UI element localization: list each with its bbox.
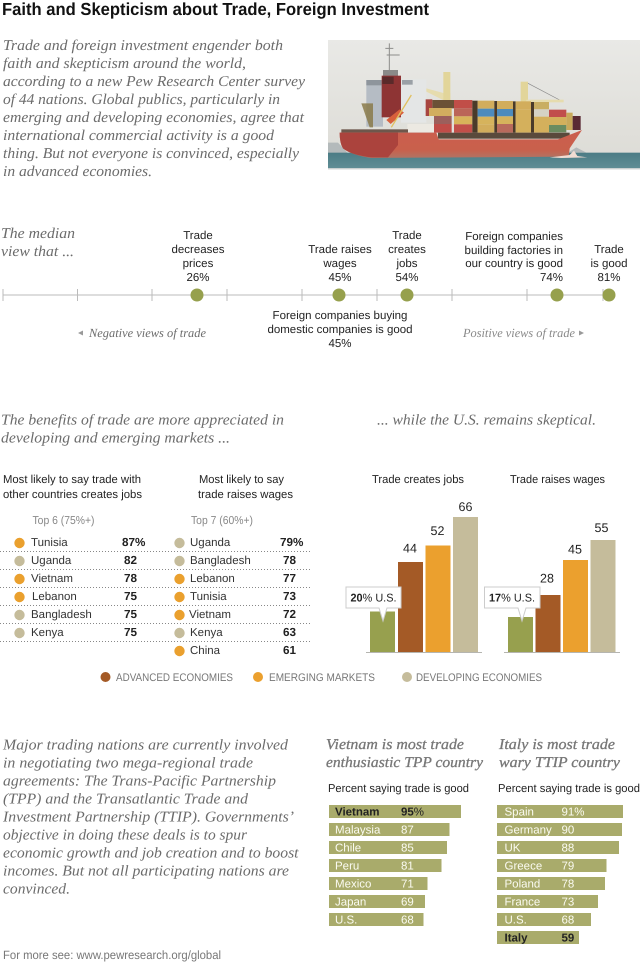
marker: foreign companies building factories: 74% [540,272,563,284]
bar chart: U.S. [335,914,357,926]
intro text block: in advanced economies. [3,164,152,180]
rows: China [190,645,221,657]
heading [498,737,640,795]
rows: Lebanon [32,591,77,603]
heading: Percent saying trade is good [328,783,469,795]
heading: enthusiastic TPP country [326,755,483,771]
bar chart: trade creates jobs [346,474,482,652]
bar chart: Italy [504,932,528,944]
rows: Vietnam [31,573,73,585]
marker: trade creates jobs: Trade [392,230,422,242]
rows: Bangladesh [31,609,92,621]
intro text block: international commercial activity is a good [3,128,275,144]
bar chart: trade raises wages: 55 [595,521,608,535]
intro text block: according to a new Pew Research Center survey [3,74,305,90]
rows: Vietnam [189,609,231,621]
rows: 72 [283,608,297,621]
photo: container ship [328,40,640,169]
bar chart: 90 [562,824,574,836]
callout: foreign companies buying domestic companies: 45% [328,338,352,350]
marker: trade decreases prices: prices [183,258,214,270]
section heading: benefits: The benefits of trade are more appreciated in [1,412,284,428]
intro text block: faith and skepticism around the world, [3,56,246,72]
label: the median view: view that ... [1,244,74,260]
callout: 20% U.S. [346,587,401,621]
bar chart: Germany [504,824,552,836]
section heading: benefits [1,412,284,446]
callout: foreign companies buying domestic companies: domestic companies is good [267,324,413,336]
rows [174,536,304,657]
body text: trade agreements: convinced. [3,882,70,898]
rows: 78 [283,554,297,567]
bar chart: Greece [504,860,542,872]
marker: trade is good: 81% [597,272,621,284]
intro text block: of 44 nations. Global publics, particularly in [3,92,280,108]
bar chart: 95% [401,806,424,818]
label: the median view: The median [1,226,75,242]
bar chart: 78 [562,878,574,890]
bar chart: 68 [562,914,574,926]
bar chart: France [504,896,540,908]
legend: ADVANCED ECONOMIES [116,672,233,684]
bar chart: 69 [401,896,414,908]
marker: trade decreases prices: decreases [171,244,225,256]
bar chart: Malaysia [335,824,381,836]
marker: trade is good: is good [590,258,628,270]
rows: 75 [124,608,138,621]
body text: trade agreements: in negotiating two mega-regional trade [3,756,253,772]
callout: foreign companies buying domestic companies: Foreign companies buying [273,310,407,322]
bar chart: Poland [504,878,540,890]
bar chart: Spain [504,806,534,818]
callout: 17% U.S. [484,587,540,621]
body text: trade agreements: Investment Partnership (TTIP). Governments’ [2,810,294,826]
rows: Kenya [190,627,223,639]
marker: trade creates jobs [388,230,426,302]
body text: trade agreements: agreements: The Trans-Pacific Partnership [3,774,277,790]
legend: DEVELOPING ECONOMIES [416,672,542,684]
table heading: Most likely to say [199,474,284,486]
label: the median view [1,226,75,260]
rows: Uganda [31,555,72,567]
marker: trade creates jobs: 54% [395,272,419,284]
bar chart: trade creates jobs: Trade creates jobs [372,474,464,486]
table: raises wages [174,474,304,657]
marker: trade decreases prices: 26% [186,272,210,284]
bar chart: Vietnam [335,806,380,818]
marker: foreign companies building factories: Foreign companies [465,231,563,243]
rows: Bangladesh [190,555,251,567]
bar chart [497,805,623,944]
rows: Kenya [31,627,64,639]
table heading: Most likely to say trade with [3,474,141,486]
bar chart: trade raises wages: 28 [540,572,554,586]
intro text block: thing. But not everyone is convinced, especially [3,146,299,162]
marker: foreign companies building factories: our country is good [465,258,563,270]
arrow label: negative views: Negative views of trade [88,326,206,340]
footer source note: For more see: www.pewresearch.org/global [3,948,221,962]
table heading: other countries creates jobs [3,489,142,501]
bar chart: U.S. [504,914,527,926]
bar chart: 71 [401,878,414,890]
bar chart: UK [504,842,521,854]
bar chart: 79 [562,860,574,872]
bar chart: trade raises wages: Trade raises wages [510,474,605,486]
heading: Vietnam is most trade [326,737,464,753]
bar chart: trade raises wages [484,474,620,652]
rows: Tunisia [31,537,68,549]
bar chart: 81 [401,860,414,872]
heading [326,737,483,795]
marker: foreign companies building factories [465,231,564,302]
section heading: benefits: developing and emerging markets ... [1,430,230,446]
intro text block: emerging and developing economies, agree that [3,110,305,126]
bar chart: trade raises wages: 45 [568,542,582,556]
bar chart: Chile [335,842,361,854]
heading: Italy is most trade [498,737,615,753]
intro text block: Trade and foreign investment engender both [3,38,283,54]
callout: foreign companies buying domestic companies [267,310,413,350]
bar chart: 59 [562,932,574,944]
rows: 87% [122,536,146,549]
bar chart: Mexico [335,878,371,890]
callout: 20% U.S.: 20% U.S. [350,592,396,604]
table heading: trade raises wages [198,489,293,501]
rows [14,536,146,639]
heading: Percent saying trade is good [498,783,640,795]
bar chart: 91% [562,806,585,818]
marker: trade raises wages [308,244,372,302]
bar chart: 88 [562,842,574,854]
bar chart: 87 [401,824,414,836]
rows: 79% [280,536,304,549]
bar chart: trade creates jobs: 44 [403,542,417,556]
rows: Tunisia [190,591,227,603]
table heading: Top 7 (60%+) [191,515,253,527]
body text: trade agreements: incomes. But not all participating nations are [3,864,289,880]
heading: wary TTIP country [499,755,620,771]
marker: trade creates jobs: jobs [395,258,418,270]
marker: trade decreases prices [171,230,225,302]
marker: trade raises wages: wages [322,258,357,270]
marker: trade decreases prices: Trade [183,230,213,242]
arrow label: positive views: Positive views of trade [462,326,575,340]
intro text block [3,38,305,180]
marker: trade raises wages: 45% [328,272,352,284]
bar chart: 68 [401,914,414,926]
bar chart: trade creates jobs: 66 [459,500,472,514]
marker: foreign companies building factories: building factories in [465,245,563,257]
bar chart: 73 [562,896,574,908]
table heading [191,474,293,527]
table heading [3,474,142,527]
rows: 73 [283,590,297,603]
rows: Uganda [190,537,231,549]
bar chart [329,805,461,926]
marker: trade raises wages: Trade raises [308,244,372,256]
marker: trade is good: Trade [594,244,624,256]
rows: 82 [124,554,138,567]
callout: 17% U.S.: 17% U.S. [489,592,535,604]
rows: 61 [283,644,297,657]
table heading: Top 6 (75%+) [32,515,95,527]
body text: trade agreements [2,738,299,898]
rows: 78 [124,572,138,585]
body text: trade agreements: economic growth and job creation and to boost [3,846,299,862]
bar chart: trade creates jobs: 52 [431,524,444,538]
body text: trade agreements: objective in doing these deals is to spur [3,828,247,844]
legend: EMERGING MARKETS [269,672,375,684]
rows: 77 [283,572,296,585]
section heading: U.S. skeptical: ... while the U.S. remains skeptical. [377,412,596,428]
rows: Lebanon [190,573,235,585]
rows: 63 [283,626,297,639]
panel: TPP countries [326,737,483,926]
bar chart: 85 [401,842,414,854]
rows: 75 [124,626,138,639]
body text: trade agreements: Major trading nations are currently involved [2,738,289,754]
timeline scale of median views [3,230,628,350]
body text: trade agreements: (TPP) and the Transatlantic Trade and [3,792,249,808]
bar chart: Peru [335,860,359,872]
marker: trade creates jobs: creates [388,244,426,256]
marker: trade is good [590,244,628,302]
table: creates jobs [3,474,146,639]
bar chart: Japan [335,896,366,908]
panel: TTIP countries [497,737,640,944]
legend [100,672,542,684]
rows: 75 [124,590,138,603]
